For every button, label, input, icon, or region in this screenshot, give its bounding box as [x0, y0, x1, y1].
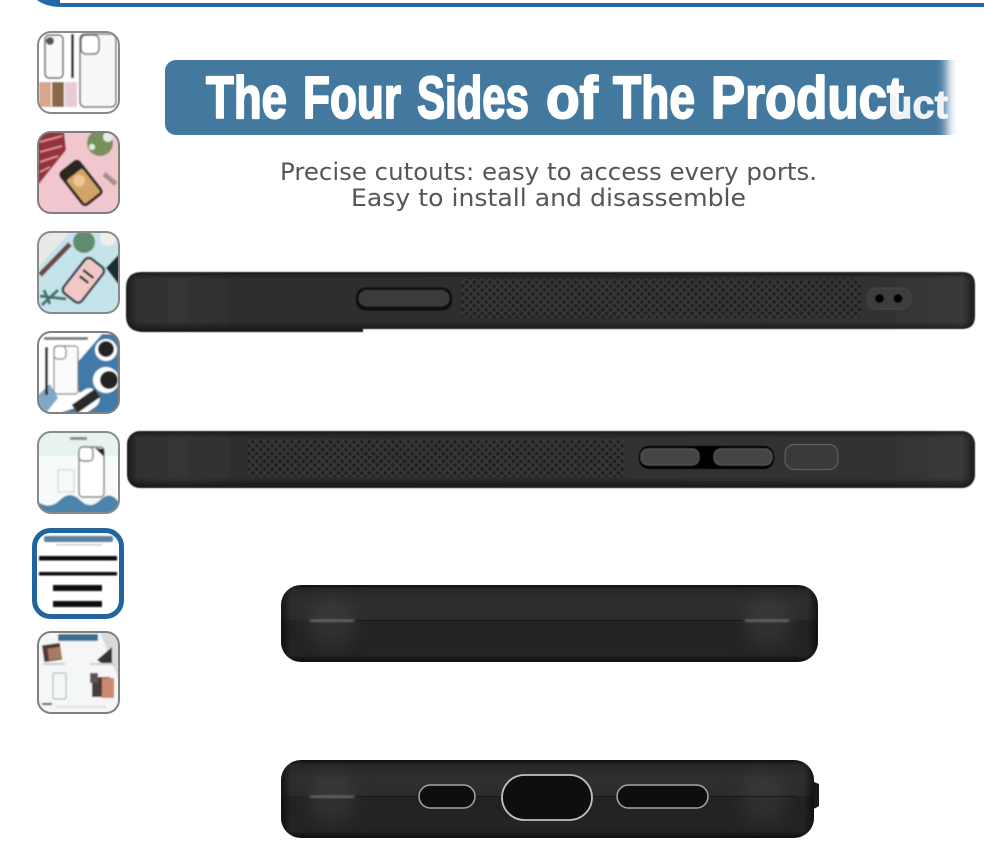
title text: The	[613, 65, 695, 131]
subtitle: Easy to install and disassemble	[351, 184, 746, 212]
grip texture	[461, 279, 861, 318]
thumbnail: case diagram	[38, 432, 119, 513]
grip texture	[248, 439, 625, 477]
title text	[206, 65, 904, 131]
volume buttons	[639, 446, 774, 469]
title banner	[165, 60, 965, 135]
power button	[356, 288, 452, 310]
thumbnail: case features	[38, 332, 119, 417]
title text: Sides	[417, 65, 529, 131]
mute switch	[785, 444, 838, 470]
subtitle	[280, 158, 817, 212]
speaker and mic cutout left	[419, 785, 475, 808]
thumbnail: blue lifestyle photo	[38, 230, 119, 313]
phone case bottom edge	[281, 760, 819, 838]
thumbnail: case overview	[38, 32, 119, 113]
title text: of	[546, 65, 598, 131]
subtitle: Precise cutouts: easy to access every ports.	[280, 158, 817, 186]
title text: Product	[711, 65, 904, 131]
thumbnail: how to use	[38, 632, 119, 713]
title text: The	[206, 65, 287, 131]
top blue selection bar	[37, 0, 984, 7]
title text: Four	[303, 65, 401, 131]
sim pinholes	[867, 288, 911, 309]
speaker cutout right	[617, 785, 708, 808]
thumbnail: pink lifestyle photo	[38, 130, 119, 213]
charging port cutout	[502, 775, 592, 820]
blurred white erase patch	[947, 44, 984, 150]
phone case top edge	[281, 585, 818, 662]
phone case side: power button	[126, 272, 975, 332]
garbled title overlap: uct	[888, 83, 948, 127]
thumbnail: selected four sides	[34, 530, 122, 616]
phone case side: volume buttons	[127, 431, 975, 488]
